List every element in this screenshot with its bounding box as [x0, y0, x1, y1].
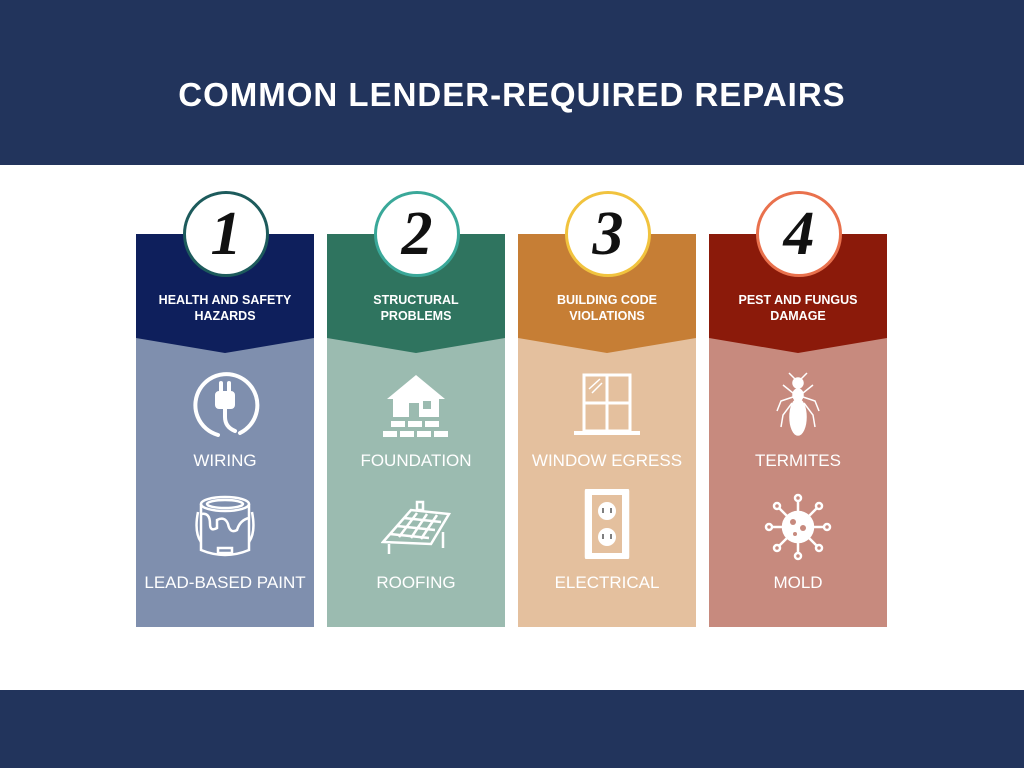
label: window egress: WINDOW EGRESS [532, 451, 682, 470]
heading [557, 293, 657, 323]
number 3: 3 [592, 200, 624, 268]
label: mold: MOLD [773, 573, 823, 592]
heading: BUILDING CODE [557, 293, 657, 307]
footer band [0, 690, 1024, 768]
icon: plug [193, 372, 260, 437]
panel: structural [327, 191, 505, 627]
heading: DAMAGE [770, 309, 826, 323]
label: roofing: ROOFING [376, 573, 456, 592]
number 2 [374, 191, 460, 277]
heading: PEST AND FUNGUS [738, 293, 858, 307]
header band [0, 0, 1024, 165]
heading: PROBLEMS [381, 309, 451, 323]
number 4: 4 [784, 200, 814, 268]
panel: pest and fungus [709, 191, 887, 627]
icon: termite [776, 372, 820, 436]
number 1: 1 [210, 200, 242, 268]
panel: building code [518, 191, 696, 627]
number 2: 2 [402, 200, 432, 268]
heading [738, 293, 858, 323]
number 3 [565, 191, 651, 277]
heading: HEALTH AND SAFETY [159, 293, 291, 307]
label: lead-based paint: LEAD-BASED PAINT [144, 573, 306, 592]
label: foundation: FOUNDATION [360, 451, 472, 470]
heading: STRUCTURAL [373, 293, 459, 307]
number 1 [183, 191, 269, 277]
label: wiring: WIRING [193, 451, 257, 470]
panel: health and safety [136, 191, 314, 627]
heading: HAZARDS [194, 309, 256, 323]
icon: outlet [584, 489, 630, 559]
heading: VIOLATIONS [569, 309, 645, 323]
heading [373, 293, 459, 323]
icon: house foundation [383, 375, 448, 437]
icon: window [574, 374, 640, 435]
heading [159, 293, 292, 323]
number 4 [756, 191, 842, 277]
title: COMMON LENDER-REQUIRED REPAIRS [178, 76, 846, 113]
icon: paint can [195, 496, 255, 556]
label: electrical: ELECTRICAL [555, 573, 659, 592]
icon: mold [764, 494, 832, 560]
label: termites: TERMITES [755, 451, 841, 470]
icon: roof [381, 500, 451, 554]
